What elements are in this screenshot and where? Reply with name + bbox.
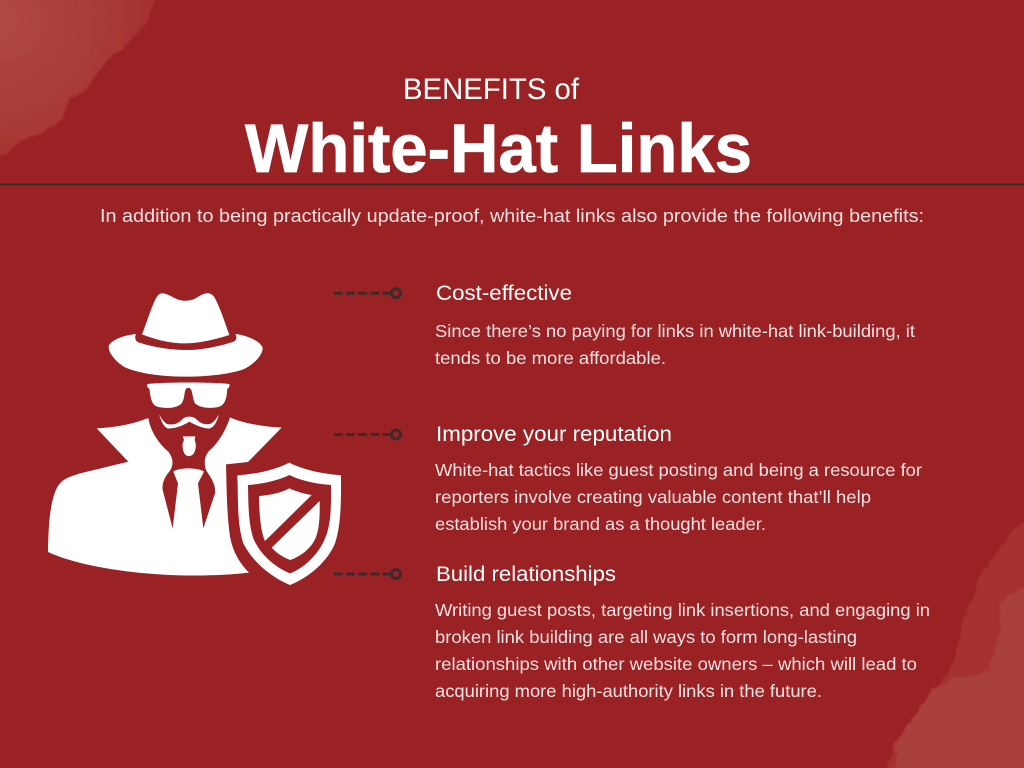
icon: goatee [183, 436, 196, 456]
benefit body [435, 600, 930, 701]
benefit body: Writing guest posts, targeting link insertions, and engaging in [435, 600, 930, 620]
benefit: build relationships [435, 563, 930, 701]
header divider [0, 184, 1024, 186]
connector: cost-effective [334, 289, 400, 298]
benefit body: relationships with other website owners – which will lead to [435, 654, 917, 674]
benefit body: acquiring more high-authority links in the future. [435, 681, 822, 701]
benefit body: establish your brand as a thought leader. [435, 514, 766, 534]
icon: shield [237, 463, 341, 585]
benefit heading: Cost-effective [436, 282, 572, 305]
benefit body: reporters involve creating valuable content that’ll help [435, 487, 871, 507]
icon: hat [109, 293, 263, 377]
benefit: cost-effective [435, 282, 915, 368]
icon: detective in hat with shield [48, 293, 341, 585]
benefit heading: Build relationships [436, 563, 616, 586]
watercolor corner: bottom right [885, 515, 1024, 768]
benefit body [435, 321, 915, 368]
benefit: improve your reputation [435, 423, 922, 534]
icon: sunglasses [147, 382, 230, 408]
connector: reputation [334, 430, 400, 439]
icon: coat and tie [48, 417, 282, 576]
benefit body: broken link building are all ways to form long-lasting [435, 627, 857, 647]
benefit body: tends to be more affordable. [435, 348, 666, 368]
heading: Benefits of: BENEFITS of [403, 73, 580, 106]
title: White-Hat Links: White-Hat Links [245, 110, 752, 187]
benefit body: White-hat tactics like guest posting and being a resource for [435, 460, 922, 480]
intro text: In addition to being practically update-proof, white-hat links also provide the following benefits: [100, 205, 924, 226]
icon: mustache [159, 414, 219, 428]
benefit body [435, 460, 922, 534]
benefit heading: Improve your reputation [436, 423, 672, 446]
watercolor corner: top left [0, 0, 160, 165]
benefit body: Since there’s no paying for links in white-hat link-building, it [435, 321, 915, 341]
connector: relationships [334, 570, 400, 578]
